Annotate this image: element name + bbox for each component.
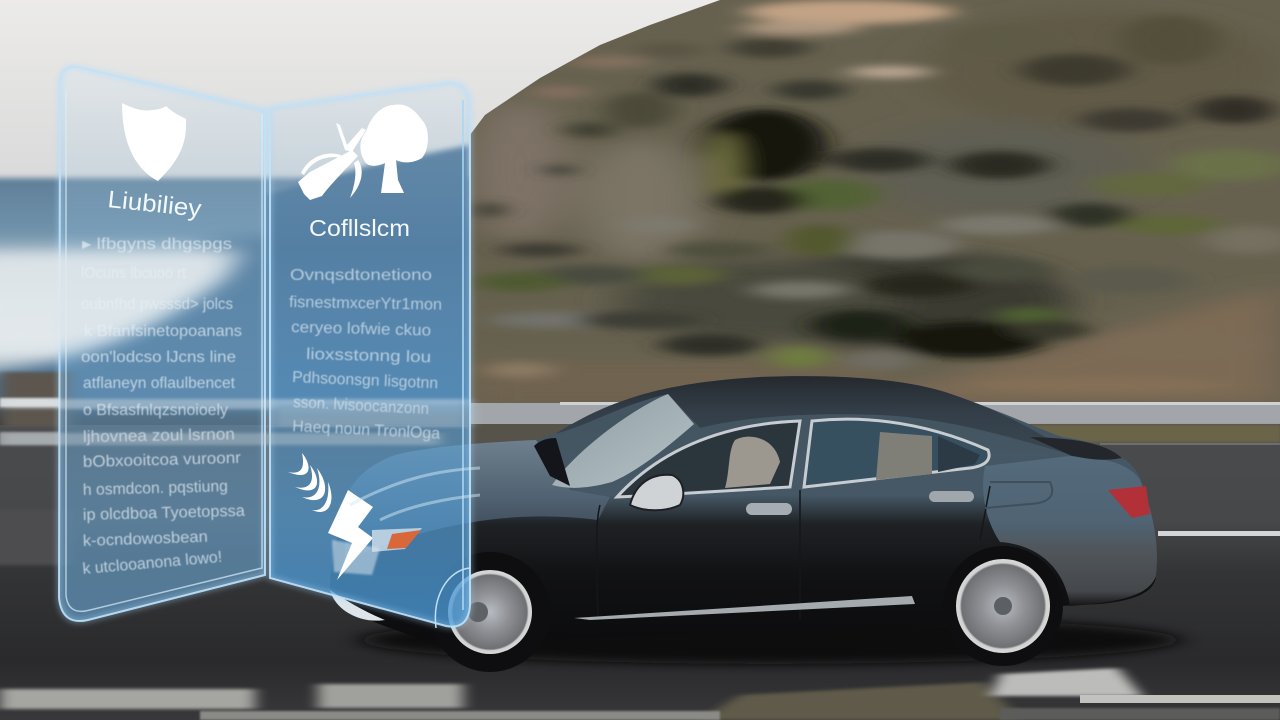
text block: collision body: Ovnqsdtonetiono: [290, 267, 432, 284]
background: sky: [0, 0, 1280, 200]
text block: liability body: ▸ lfbgyns dhgspgs: [82, 236, 232, 253]
rear panel: [983, 456, 1157, 606]
front bumper: [330, 590, 385, 621]
text block: liability body: oon'lodcso lJcns line: [81, 349, 236, 366]
hood highlights: [350, 468, 480, 520]
icon: shield: [122, 103, 186, 181]
background: guardrail: [0, 398, 1280, 565]
background: foam and shore: [0, 145, 500, 410]
text block: collision body: fisnestmxcerYtr1mon: [289, 294, 442, 314]
side mirror: [630, 475, 683, 510]
holographic panels: [0, 67, 480, 628]
heading: liability: Liubiliey: [106, 186, 203, 223]
text block: liability body: atflaneyn oflaulbencet: [83, 375, 236, 392]
car shadow: [360, 616, 1180, 664]
text block: collision body: sson. lvisoocanzonn: [293, 394, 429, 418]
car roof: [555, 376, 1075, 456]
text block: liability body: o Bfsasfnlqzsnoioely: [83, 402, 228, 419]
text block: liability body: k utclooanona lowo!: [82, 549, 223, 578]
text block: liability body: k Bfanfsinetopoanans: [84, 323, 242, 340]
side windows: [617, 419, 989, 497]
panel: liability: [0, 67, 265, 621]
rear wheel: [943, 546, 1063, 666]
panel: collision: [270, 83, 480, 628]
icon: car hitting tree: [298, 104, 428, 200]
icon: signal waves: [288, 453, 331, 512]
tail light: [1108, 486, 1150, 518]
front wheel: [430, 552, 550, 672]
background: blurred hillside: [470, 0, 1280, 405]
text block: liability body: ljhovnea zoul lsrnon: [83, 426, 235, 446]
text block: collision body: Haeq noun TronlOga: [292, 418, 441, 443]
car hood: [345, 440, 610, 560]
icon: lightning bolt: [328, 490, 380, 580]
text block: collision body: ceryeo lofwie ckuo: [291, 319, 431, 340]
foam band: [0, 250, 245, 352]
background: road markings: [0, 531, 1280, 720]
heading: collision: Cofllslcm: [309, 215, 410, 241]
door lines and handles: [597, 482, 1052, 620]
text block: liability body: [81, 236, 245, 578]
text block: collision body: Pdhsoonsgn lisgotnn: [292, 369, 438, 392]
headlight: [372, 528, 422, 552]
text block: collision body: lioxsstonng lou: [306, 346, 431, 366]
text block: liability body: lOcuns lbcuoo rt: [81, 265, 187, 282]
text block: liability body: oubnfhd pwsssd> jolcs: [81, 296, 233, 313]
light streaks across panels: [0, 399, 470, 445]
car body: [330, 376, 1157, 640]
spoiler: [1030, 437, 1122, 460]
text block: liability body: h osmdcon. pqstiung: [83, 478, 228, 499]
car: [330, 376, 1180, 672]
chrome sill: [574, 596, 915, 620]
text block: collision body: [289, 267, 442, 443]
text block: liability body: bObxooitcoa vuroonr: [83, 450, 242, 471]
text block: liability body: ip olcdboa Tyoetopssa: [83, 503, 245, 524]
background: road: [0, 425, 1280, 720]
windshield: [552, 394, 694, 488]
text block: liability body: k-ocndowosbean: [83, 529, 208, 550]
background: blurred sea: [0, 178, 480, 388]
lens circle: [435, 568, 470, 628]
